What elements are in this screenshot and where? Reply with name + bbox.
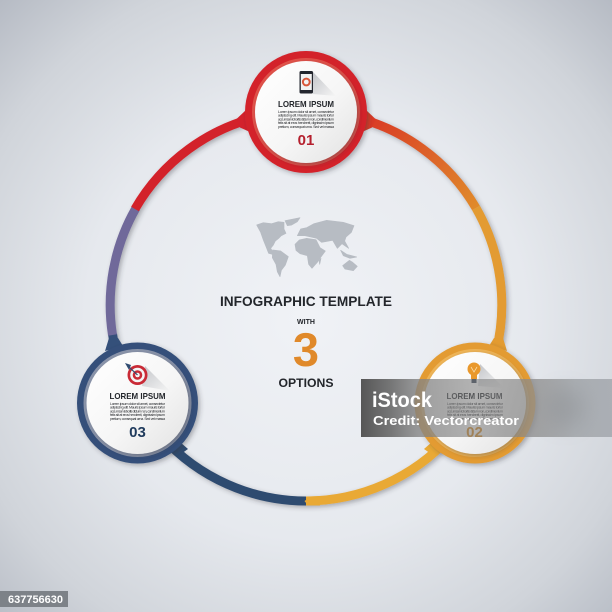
body text: accumsan lobortis dictum non, condimentum: [278, 117, 334, 121]
body text: [110, 402, 166, 421]
circle 01: [245, 51, 367, 173]
disc: [424, 352, 526, 454]
number 03: 03: [129, 424, 146, 441]
arc segment: navy stub at left circle: [112, 334, 116, 352]
heading: LOREM IPSUM: [110, 391, 166, 401]
label: with: WITH: [297, 319, 315, 326]
body text: pretium, consequat urna. Sed vel massa: [447, 417, 504, 421]
label: options: OPTIONS: [278, 376, 334, 390]
arrow tip: yellow over navy: [304, 496, 320, 506]
big number 3: 3: [293, 323, 319, 376]
title: INFOGRAPHIC TEMPLATE: [220, 293, 392, 309]
body text: pretium, consequat urna. Sed vel massa: [110, 417, 166, 421]
body text: Lorem ipsum dolor sit amet, consectetur: [110, 402, 166, 406]
outer ring: [77, 342, 198, 464]
disc: [255, 61, 357, 163]
outer ring: [245, 51, 367, 173]
outer ring: [414, 342, 536, 464]
heading: LOREM IPSUM: [278, 99, 334, 109]
arc segment: slate left: [110, 208, 136, 335]
watermark band: [361, 379, 612, 437]
ring: connecting arc segments: [110, 116, 502, 501]
heading: LOREM IPSUM: [446, 391, 502, 401]
arc segment: orange right: [476, 208, 502, 352]
body text: adipiscing elit. Mauris ipsum mauris tortor: [447, 406, 504, 410]
number 01: 01: [298, 132, 314, 149]
arc segment: red-orange upper right: [350, 116, 476, 208]
icon: target with dart: [125, 363, 170, 391]
body text: felis sit at eros hendrerit, dignissim ipsum: [278, 121, 334, 125]
arc segment: yellow lower right: [306, 437, 450, 501]
arc segment: red upper left: [135, 116, 262, 209]
image id tag: 637756630: [8, 594, 63, 606]
image id tag: [0, 591, 68, 607]
icon: smartphone: [300, 71, 336, 96]
icon: light bulb: [468, 362, 504, 388]
arc segment: navy lower left: [162, 437, 306, 501]
body text: accumsan lobortis dictum non, condimentum: [447, 409, 503, 413]
body text: felis sit at eros hendrerit, dignissim ipsum: [447, 413, 503, 417]
body text: Lorem ipsum dolor sit amet, consectetur: [447, 402, 504, 406]
ring joints: flares into circles: [105, 110, 507, 456]
body text: felis sit at eros hendrerit, dignissim ipsum: [110, 413, 165, 417]
body text: [278, 110, 335, 129]
number 02: 02: [466, 424, 483, 441]
body text: Lorem ipsum dolor sit amet, consectetur: [278, 110, 335, 114]
body text: adipiscing elit. Mauris ipsum mauris tortor: [110, 406, 166, 410]
disc: [86, 352, 188, 454]
body text: [447, 402, 504, 421]
world map: [257, 218, 357, 277]
watermark credit: Credit: Vectorcreator: [373, 413, 519, 428]
watermark logo: iStock: [372, 389, 432, 412]
circle 03: [77, 342, 198, 464]
body text: adipiscing elit. Mauris ipsum mauris tortor: [278, 114, 335, 118]
circle 02: [414, 342, 536, 464]
body text: accumsan lobortis dictum non, condimentum: [110, 409, 165, 413]
body text: pretium, consequat urna. Sed vel massa: [278, 125, 335, 129]
